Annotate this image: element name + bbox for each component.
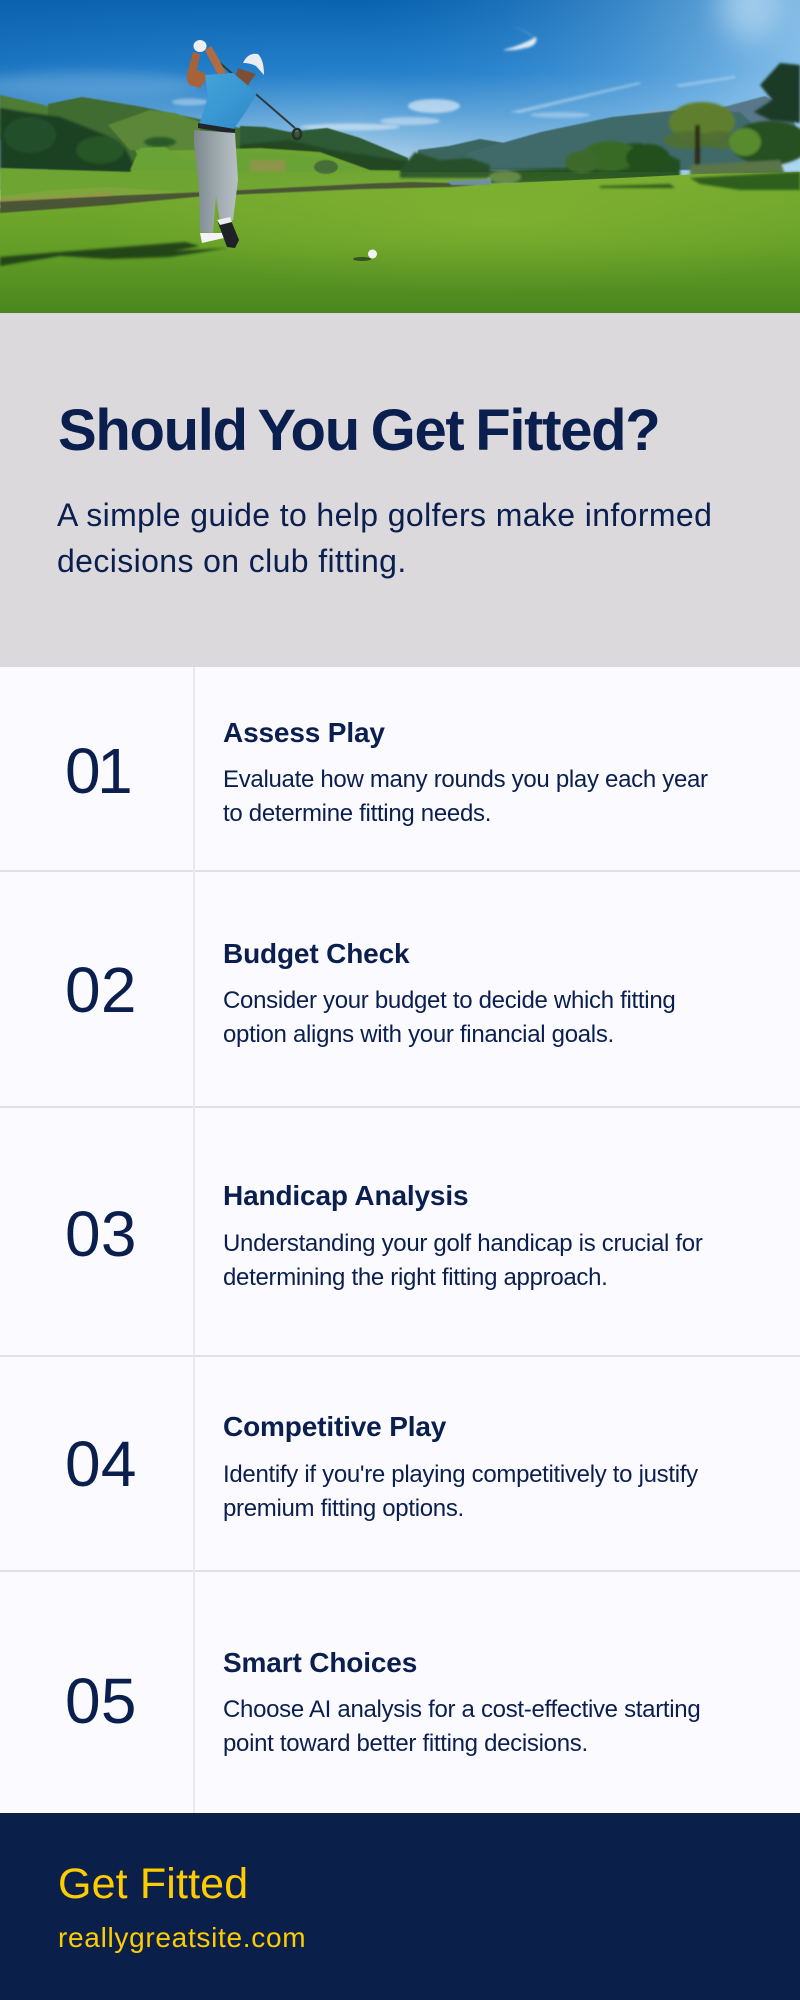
description: Identify if you're playing competitively to justify — [223, 1461, 698, 1488]
header panel — [0, 313, 800, 667]
description: Choose AI analysis for a cost-effective starting — [223, 1696, 700, 1723]
number 05: 05 — [65, 1665, 137, 1737]
club — [213, 57, 295, 128]
left tree line — [0, 108, 450, 178]
heading: Handicap Analysis: Handicap Analysis — [223, 1180, 468, 1211]
description: to determine fitting needs. — [223, 800, 491, 826]
step 02 — [0, 872, 800, 1108]
clouds — [172, 25, 735, 130]
hero photo: golfer on fairway — [0, 0, 800, 313]
sky — [0, 0, 800, 190]
description — [223, 766, 708, 826]
footer — [0, 1813, 800, 2000]
mountains — [0, 95, 800, 175]
left shoe — [200, 233, 224, 243]
heading: Budget Check: Budget Check — [223, 938, 409, 969]
description — [223, 1696, 700, 1756]
description: premium fitting options. — [223, 1494, 464, 1522]
step 01 — [0, 667, 800, 872]
right arm — [205, 46, 226, 75]
heading: Assess Play: Assess Play — [223, 717, 385, 748]
golfer — [187, 40, 301, 248]
foreground fairway — [0, 172, 800, 313]
head and cap — [234, 68, 256, 90]
shirt — [199, 73, 257, 130]
heading: Smart Choices: Smart Choices — [223, 1647, 417, 1678]
step 05 — [0, 1572, 800, 1813]
description: Consider your budget to decide which fitting — [223, 987, 675, 1014]
step 03 — [0, 1108, 800, 1357]
trousers — [194, 130, 238, 233]
glove — [194, 40, 206, 52]
title: Should You Get Fitted? — [58, 398, 659, 463]
subtitle: decisions on club fitting. — [57, 543, 407, 579]
description: option aligns with your financial goals. — [223, 1020, 614, 1048]
centre and right trees — [400, 63, 800, 184]
left arm — [187, 52, 207, 88]
step 04 — [0, 1357, 800, 1572]
mid fairway and greens — [0, 147, 490, 205]
description — [223, 987, 675, 1048]
number 02: 02 — [65, 954, 137, 1026]
belt — [198, 123, 235, 134]
right shoe — [217, 218, 239, 248]
description: determining the right fitting approach. — [223, 1264, 608, 1290]
number 01: 01 — [65, 735, 129, 807]
golfer shadow — [0, 242, 228, 266]
subtitle: A simple guide to help golfers make informed — [57, 497, 712, 533]
pond — [0, 179, 490, 213]
number 04: 04 — [65, 1428, 137, 1500]
footer url: reallygreatsite.com — [58, 1922, 306, 1953]
golf ball — [353, 250, 377, 261]
description: Evaluate how many rounds you play each year — [223, 766, 708, 793]
footer title: Get Fitted — [58, 1860, 248, 1908]
description — [223, 1230, 703, 1290]
description: Understanding your golf handicap is crucial for — [223, 1230, 703, 1257]
subtitle — [57, 497, 712, 579]
number 03: 03 — [65, 1198, 137, 1270]
heading: Competitive Play: Competitive Play — [223, 1411, 446, 1442]
description — [223, 1461, 698, 1522]
right shadows — [600, 172, 800, 190]
description: point toward better fitting decisions. — [223, 1730, 588, 1756]
